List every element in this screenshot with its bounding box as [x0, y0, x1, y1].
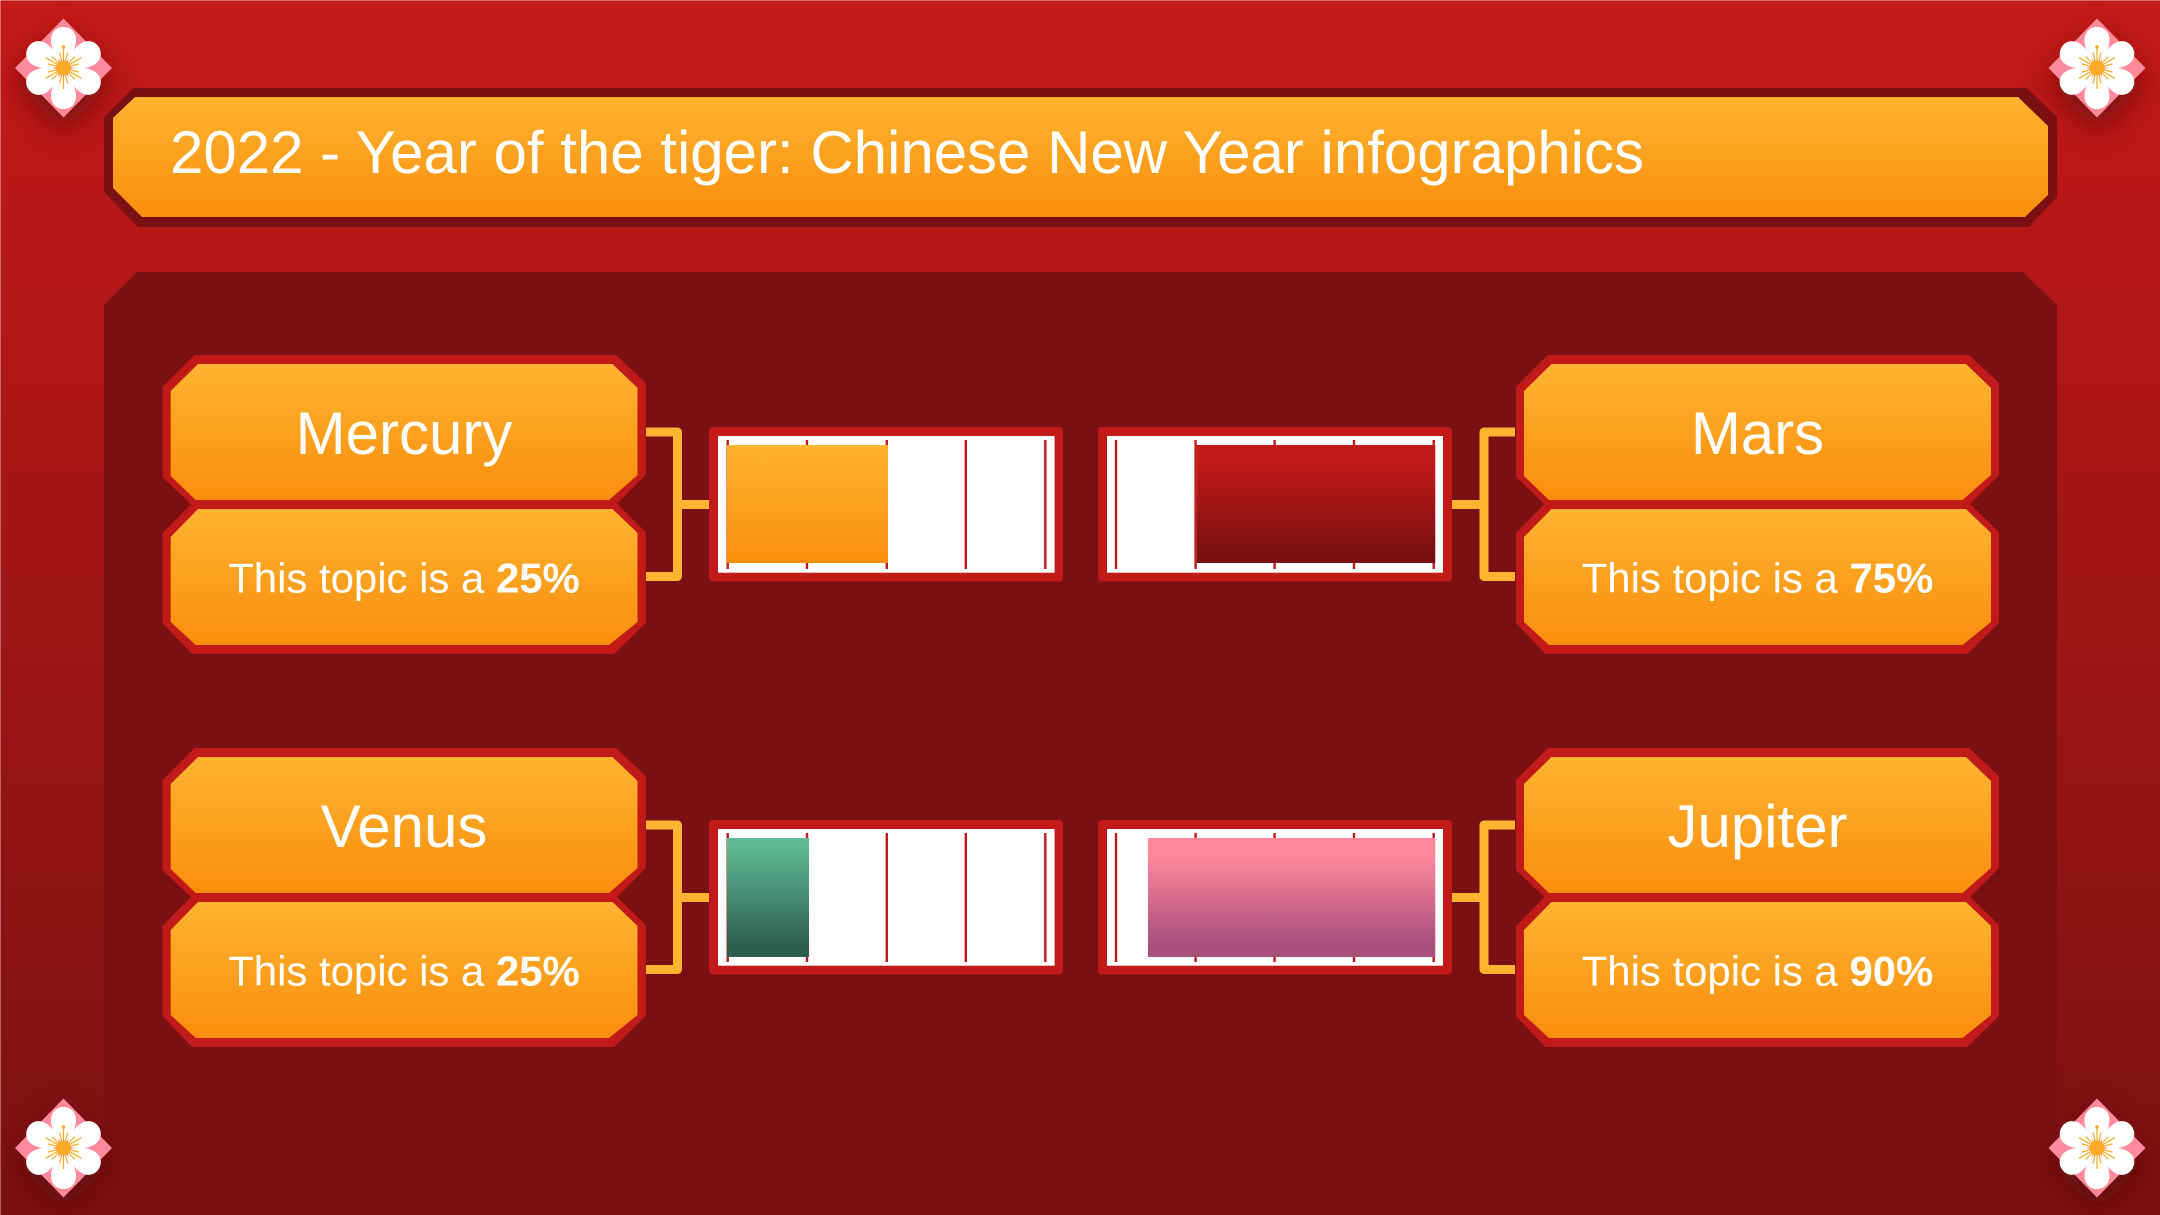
value box: Mars 75%	[1516, 503, 1999, 654]
icon: flower top right	[2048, 18, 2146, 132]
label box: Mars: Mars	[1691, 400, 1824, 467]
connector bracket	[646, 432, 710, 576]
value box: Venus 25%	[162, 896, 646, 1047]
connector bracket	[646, 825, 710, 970]
icon: flower bottom left	[15, 1098, 112, 1212]
value box: Jupiter 90%: This topic is a 90%	[1582, 948, 1933, 995]
label box: Venus: Venus	[321, 793, 487, 860]
icon: flower bottom right	[2048, 1098, 2146, 1212]
label box: Mercury: Mercury	[296, 400, 512, 467]
progress bar: Jupiter	[1098, 820, 1452, 974]
title text: 2022 - Year of the tiger: Chinese New Year infographics	[170, 119, 1644, 186]
icon: flower top left	[15, 18, 112, 132]
title banner	[104, 88, 2057, 227]
value box: Mars 75%: This topic is a 75%	[1582, 555, 1933, 602]
connector bracket	[1452, 825, 1515, 970]
progress bar: Mercury	[709, 427, 1063, 582]
label box: Jupiter: Jupiter	[1667, 793, 1848, 860]
value box: Venus 25%: This topic is a 25%	[228, 948, 580, 995]
label box: Mars	[1516, 355, 1999, 505]
label box: Venus	[162, 748, 646, 898]
label box: Jupiter	[1516, 748, 1999, 898]
panel: Jupiter topic	[1098, 748, 1999, 1047]
panel: Mercury topic	[162, 355, 1063, 654]
value box: Mercury 25%	[162, 503, 646, 654]
connector bracket	[1452, 432, 1515, 576]
progress bar: Venus	[709, 820, 1063, 974]
panel: main dark panel	[104, 272, 2057, 1215]
panel: Mars topic	[1098, 355, 1999, 654]
label box: Mercury	[162, 355, 646, 505]
panel: Venus topic	[162, 748, 1063, 1047]
value box: Jupiter 90%	[1516, 896, 1999, 1047]
value box: Mercury 25%: This topic is a 25%	[228, 555, 580, 602]
progress bar: Mars	[1098, 427, 1452, 582]
